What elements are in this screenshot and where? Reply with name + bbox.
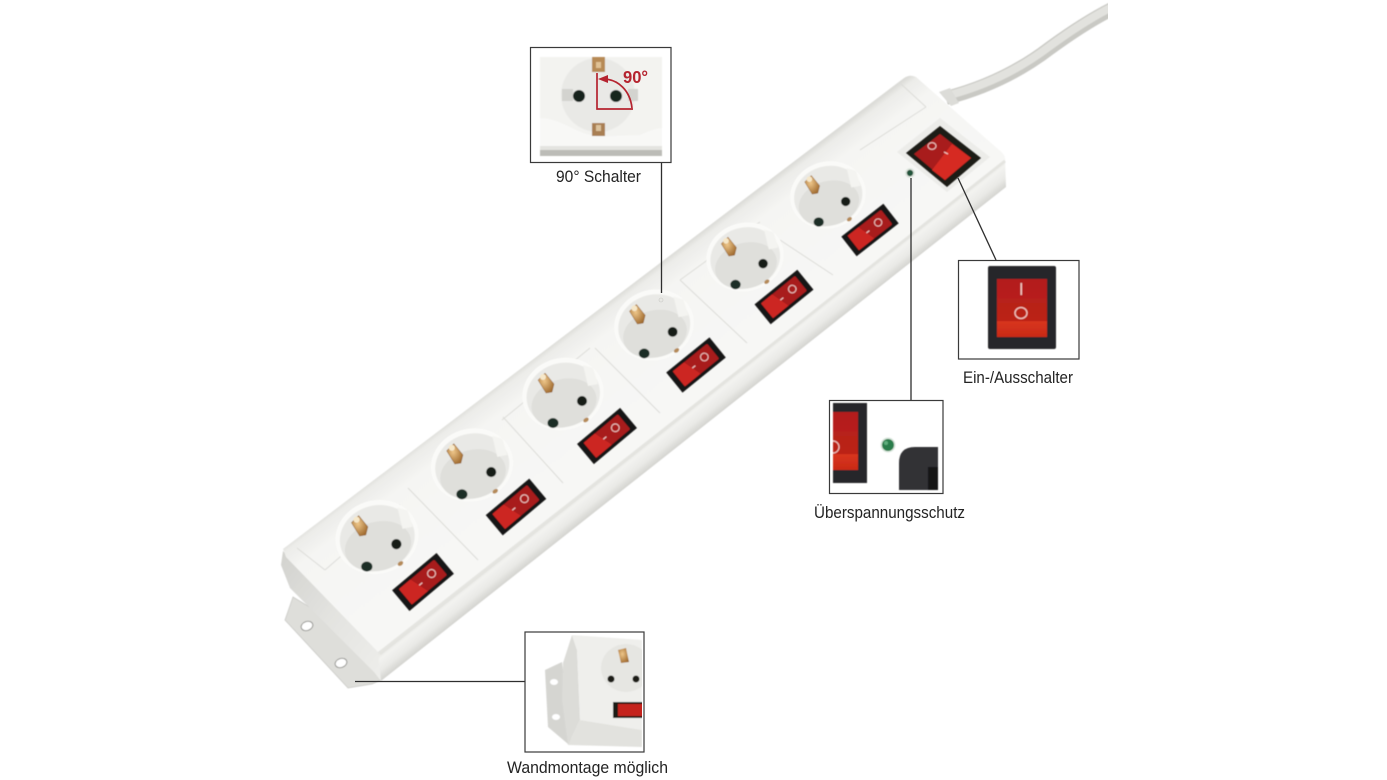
ridge shading [380, 161, 1005, 654]
connector lines [355, 162, 996, 682]
socket 3 [514, 349, 612, 439]
rotation angle label: 90° [623, 67, 648, 87]
label: 90 degree switch: 90° Schalter [556, 167, 641, 186]
switch 6 [841, 204, 899, 256]
switch 1 [392, 553, 454, 611]
connector end dot [659, 298, 663, 302]
infographic: power strip with feature callouts [280, 2, 1108, 776]
switch 2 [486, 479, 546, 535]
mounting flange [285, 597, 381, 688]
callout: 90 degree switch [530, 48, 671, 162]
socket 2 [423, 419, 521, 511]
socket 4 [606, 281, 702, 369]
top face [283, 76, 1005, 652]
callout: wall mounting [525, 632, 651, 752]
inset photo: switch, LED and plug recess [833, 403, 938, 490]
label: wall mounting: Wandmontage möglich [507, 758, 668, 777]
surge protection LED [905, 168, 915, 178]
raised strip and module seams [297, 84, 926, 570]
end face [281, 551, 381, 681]
sockets [327, 153, 873, 583]
power cord [939, 7, 1112, 106]
label: surge protection: Überspannungsschutz [814, 503, 965, 522]
inset photo: strip end with flange [545, 635, 651, 747]
rocker switches [392, 204, 899, 611]
front face [378, 158, 1006, 681]
callout: on/off switch [958, 260, 1079, 359]
switch 5 [755, 270, 813, 324]
socket 1 [327, 491, 427, 583]
recess for main switch [897, 118, 990, 192]
label: on/off switch: Ein-/Ausschalter [963, 368, 1073, 387]
power strip body [281, 76, 1006, 688]
callout: surge protection [830, 400, 943, 494]
main on/off switch [906, 126, 981, 187]
socket 6 [783, 153, 873, 237]
socket 5 [699, 214, 791, 300]
inset photo: rocker switch [988, 266, 1056, 349]
switch 4 [666, 337, 726, 393]
switch 3 [577, 408, 637, 464]
rotation marker [597, 73, 633, 109]
inset photo: socket rotated by 90 degrees [540, 57, 662, 156]
